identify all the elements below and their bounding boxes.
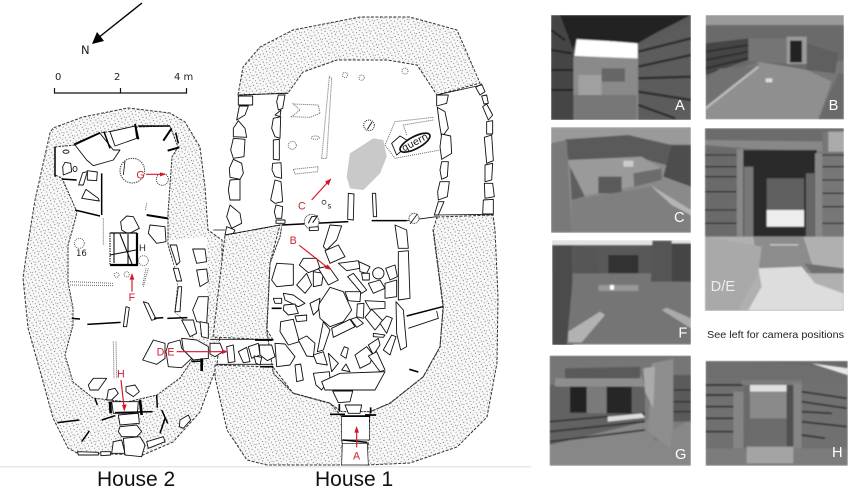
arrow F [129,273,136,304]
arrow H: H [117,369,125,381]
photo D/E [705,128,844,311]
photo G [550,356,691,466]
photo G: G [675,447,686,463]
photo H [706,361,848,466]
photo A [551,15,691,120]
scale bar: 4 m [174,72,193,83]
caption: camera positions: See left for camera positions [707,329,844,341]
arrow B: B [290,235,297,247]
arrow G: G [136,169,145,181]
arrow D/E: D/E [157,347,174,359]
red camera arrows on plan [117,169,361,462]
arrow D/E [157,347,228,359]
House 1 north room walls and features: s [327,202,332,211]
scale bar [54,72,193,93]
House 2 stippled bank [23,108,222,455]
plan bottom rule [0,466,531,468]
plan: House 2 [23,108,222,457]
photo B: B [829,98,838,114]
House 1 west lower stippled bank [215,365,342,465]
photo C [551,127,691,233]
photo B [706,15,844,119]
House 2 interior floor [55,126,195,402]
arrow B [290,235,332,270]
arrow F: F [129,292,136,304]
photo H: H [832,445,843,461]
House 1 east stippled bank [367,215,498,465]
photo C: C [674,210,685,226]
arrow H [117,369,127,412]
photo A: A [675,98,685,114]
niche H: H [139,243,146,254]
House 1 west upper stippled bank [213,225,280,340]
House 2 north room stones [55,124,179,248]
House 1 label: House 1 [315,468,393,491]
niche H [110,233,146,265]
label 16: 16 [76,249,87,259]
arrow G [136,169,166,181]
House 1 north room walls and features [225,68,494,235]
House 1 north stippled bank [238,17,480,95]
arrow A [353,426,361,462]
north arrow: N [81,43,90,57]
scale bar: 2 [114,72,120,83]
photo F [552,240,691,345]
House 2 label: House 2 [97,468,175,491]
House 1 south room and corridor stones [210,225,443,465]
arrow A: A [353,450,361,462]
quern: quern [400,131,430,154]
north arrow [81,3,142,57]
photo F: F [678,326,687,342]
scale bar: 0 [55,72,61,83]
arrow C [298,178,331,212]
arrow C: C [298,200,306,212]
photo D/E: D/E [711,279,735,295]
House 2 south room stones [57,245,208,457]
House 2 side wall fill [168,237,207,342]
plan: House 1 [210,17,498,465]
